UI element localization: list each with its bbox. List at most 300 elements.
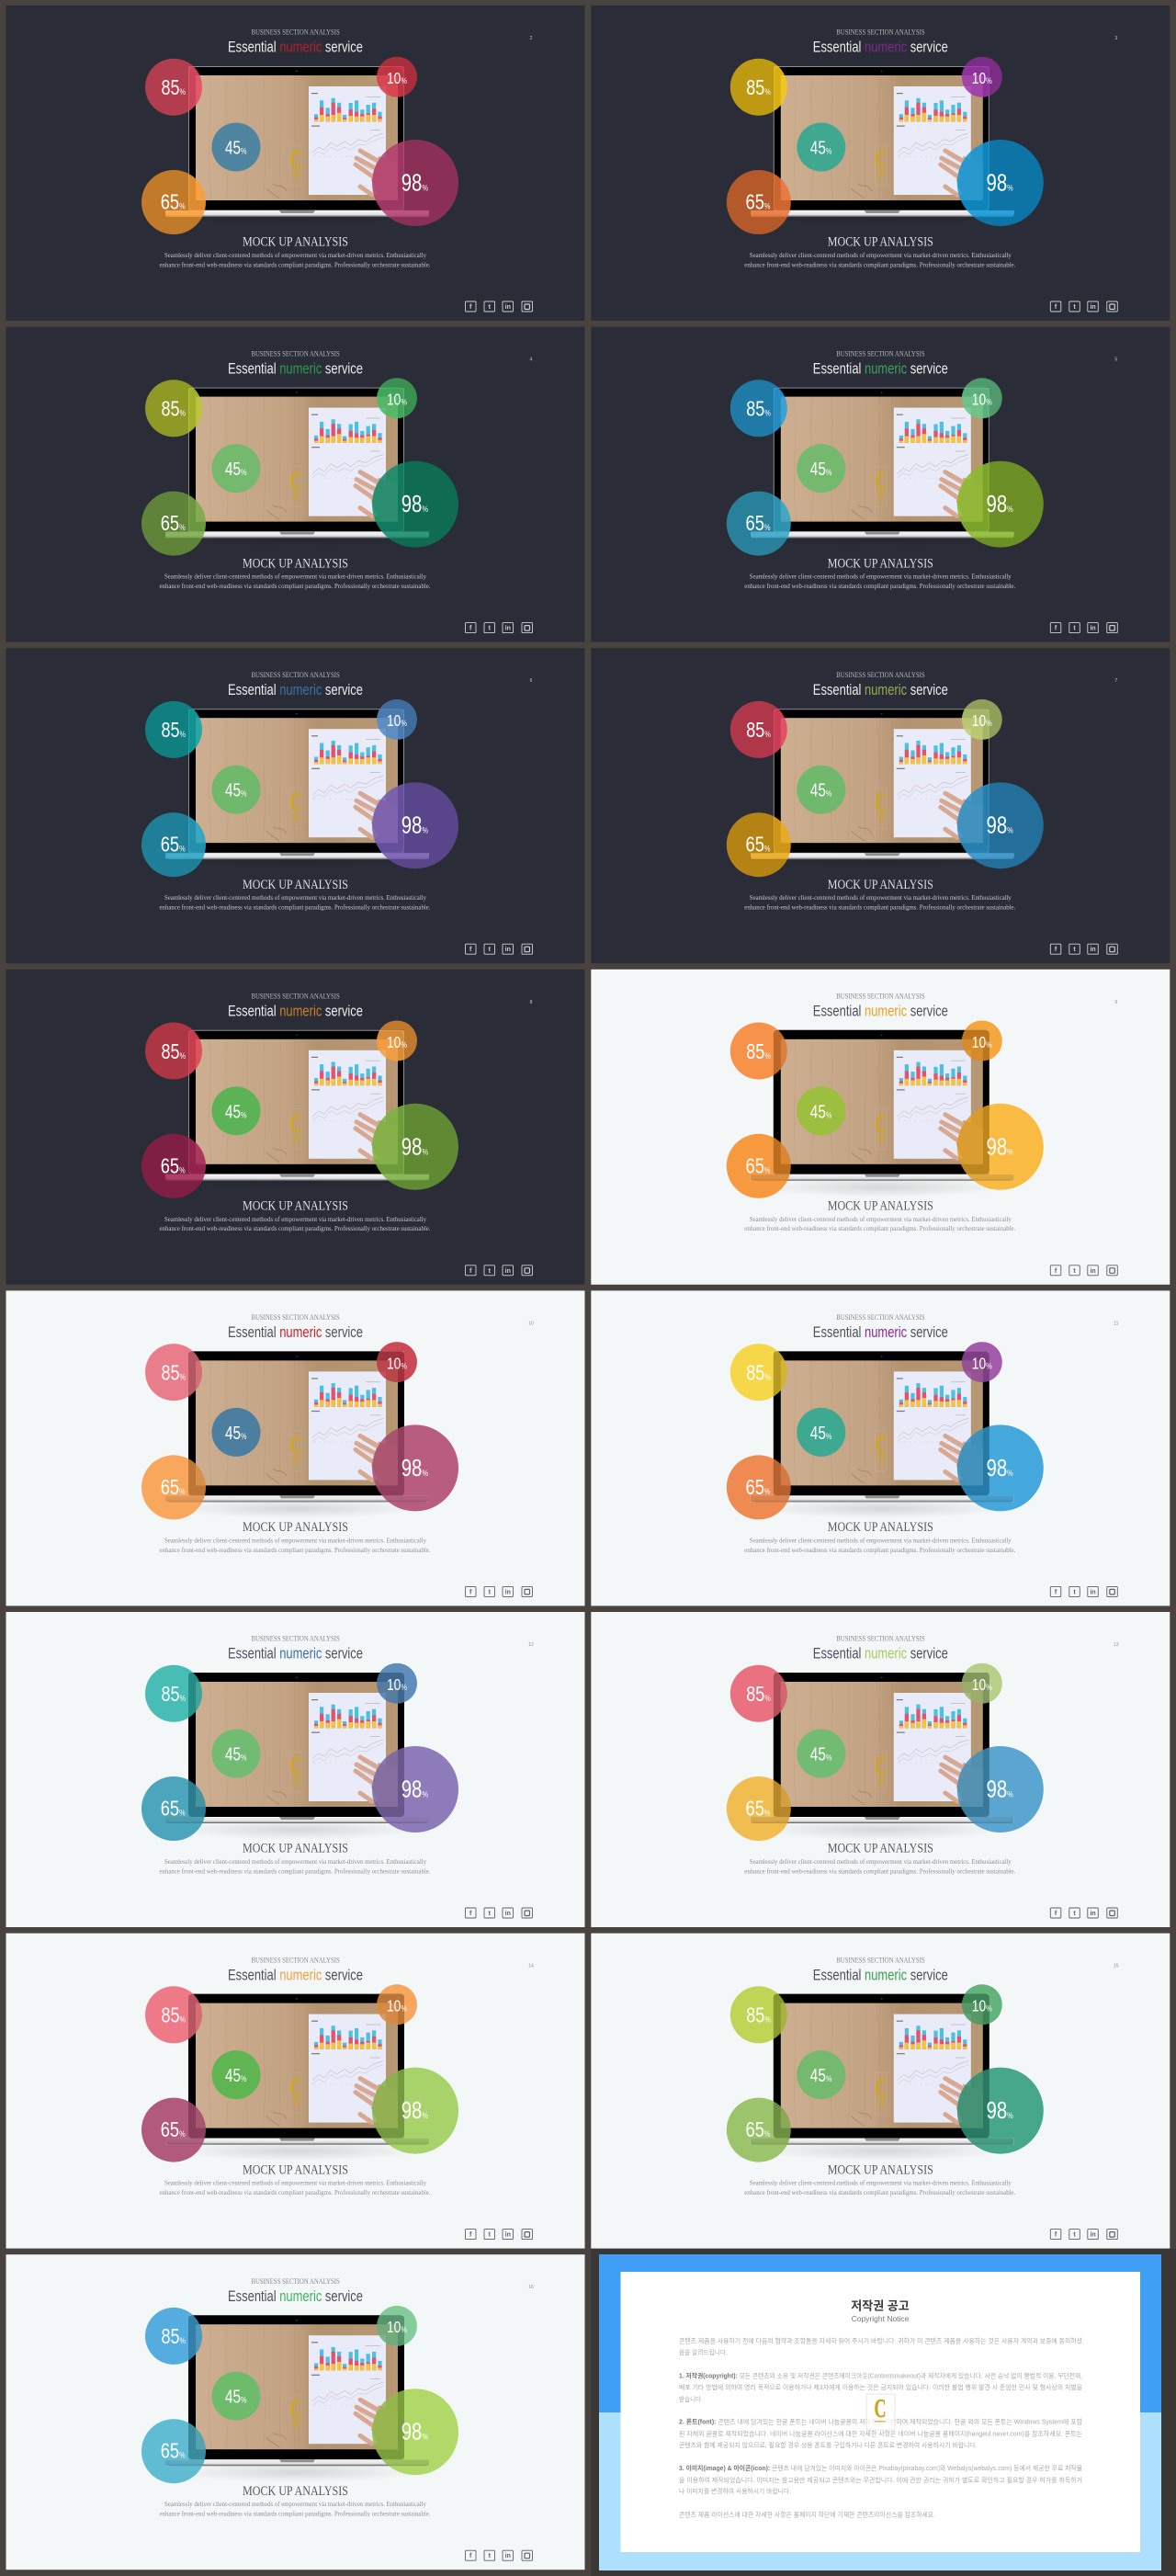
stat 45%: 45%	[225, 2066, 247, 2086]
stat 10%	[377, 57, 417, 97]
heading: MOCK UP ANALYSIS	[243, 1842, 348, 1856]
stat 45%: 45%	[810, 138, 832, 158]
body text: Seamlessly deliver client-centered methods of empowerment via market-driven metrics. Enthusiastically	[164, 2179, 426, 2187]
panel: slide 2 dark red	[6, 6, 584, 321]
social icons: f	[469, 304, 472, 311]
stat 65%	[727, 1134, 791, 1198]
page number: 2	[530, 36, 533, 41]
notice section 3 image and icon	[679, 2464, 1083, 2495]
title: Essential numeric service	[228, 1323, 363, 1341]
subtitle: BUSINESS SECTION ANALYSIS	[252, 349, 340, 357]
stat 45%: 45%	[810, 2066, 832, 2086]
social icons: in	[1090, 626, 1096, 632]
stat 85%: 85%	[746, 718, 771, 742]
social icons: t	[489, 304, 492, 311]
stat 98%: 98%	[401, 490, 428, 517]
stat 10%	[962, 1663, 1002, 1704]
social icons: t	[1073, 2232, 1076, 2239]
stat 65%	[141, 2098, 206, 2162]
stat 85%	[730, 1022, 787, 1079]
title: Essential numeric service	[228, 1645, 363, 1662]
body text: Seamlessly deliver client-centered methods of empowerment via market-driven metrics. Enthusiastically	[750, 573, 1012, 581]
stat 65%: 65%	[161, 189, 186, 213]
stat 45%	[797, 444, 845, 493]
title: Essential numeric service	[228, 39, 363, 56]
panel: slide 14 light pink lime	[6, 1934, 584, 2249]
body text: enhance front-end web-readiness via standards compliant paradigms. Professionally orchestrate sustainable.	[744, 2188, 1015, 2196]
title: Essential numeric service	[813, 1003, 948, 1020]
social icons	[1050, 944, 1117, 954]
stat 85%: 85%	[746, 75, 771, 99]
stat 45%	[211, 766, 261, 814]
social icons: in	[1090, 304, 1096, 311]
stat 10%	[962, 378, 1002, 418]
stat 45%: 45%	[810, 460, 832, 480]
panel: slide 3 dark purple	[591, 6, 1170, 321]
stat 85%: 85%	[162, 1039, 186, 1063]
body text	[744, 1536, 1015, 1554]
notice section 2 font: 2. 폰트(font): 콘텐츠 내에 담겨있는 한글 폰트는 네이버 나눔글꼴의 저작권을 기반하여 제작되었습니다. 한글 외의 모든 폰트는 Windows System에 포함	[679, 2418, 1083, 2426]
stat 65%: 65%	[161, 1153, 186, 1177]
body text	[160, 893, 431, 912]
panel: slide 4 dark green	[6, 327, 584, 642]
page number: 12	[528, 1642, 534, 1648]
social icons: t	[489, 626, 492, 632]
stat 45%: 45%	[225, 138, 247, 158]
stat 65%	[141, 812, 206, 877]
body text: enhance front-end web-readiness via standards compliant paradigms. Professionally orchestrate sustainable.	[160, 2510, 431, 2518]
body text: enhance front-end web-readiness via standards compliant paradigms. Professionally orchestrate sustainable.	[160, 1867, 431, 1875]
social icons	[465, 2550, 533, 2560]
stat 10%	[377, 1663, 417, 1704]
notice intro: 음을 알려드립니다.	[679, 2348, 728, 2356]
body text: Seamlessly deliver client-centered methods of empowerment via market-driven metrics. Enthusiastically	[164, 1857, 426, 1866]
stat 45%: 45%	[225, 1424, 247, 1444]
social icons: f	[469, 1589, 472, 1595]
stat 45%: 45%	[810, 1424, 832, 1444]
stat 85%	[730, 1344, 787, 1401]
subtitle: BUSINESS SECTION ANALYSIS	[252, 2277, 340, 2286]
social icons: in	[1090, 2232, 1096, 2239]
page number: 4	[530, 357, 533, 363]
laptop mockup: C	[876, 468, 887, 496]
body text: enhance front-end web-readiness via standards compliant paradigms. Professionally orchestrate sustainable.	[744, 1224, 1015, 1232]
stat 65%	[727, 492, 791, 556]
social icons: in	[505, 947, 511, 953]
notice intro	[679, 2336, 1083, 2356]
subtitle: BUSINESS SECTION ANALYSIS	[836, 671, 925, 679]
social icons: f	[469, 947, 472, 953]
stat 10%	[377, 378, 417, 418]
body text: enhance front-end web-readiness via standards compliant paradigms. Professionally orchestrate sustainable.	[744, 260, 1015, 268]
laptop mockup	[165, 388, 429, 548]
notice section 1 copyright: 받습니다.	[679, 2395, 703, 2403]
stat 65%: 65%	[161, 2439, 186, 2463]
page number: 11	[1114, 1321, 1119, 1326]
page number: 6	[530, 678, 533, 684]
panel: slide 11 light purple	[591, 1290, 1170, 1606]
stat 10%	[377, 1342, 417, 1382]
body text	[744, 1215, 1015, 1232]
stat 10%	[377, 1984, 417, 2025]
stat 85%	[730, 1665, 787, 1722]
stat 98%	[372, 2389, 458, 2475]
laptop mockup: C	[290, 468, 301, 496]
body text: Seamlessly deliver client-centered methods of empowerment via market-driven metrics. Enthusiastically	[750, 1536, 1012, 1544]
notice section 2 font: 콘텐츠와 함께 제공되지 않으므로, 필요할 경우 상용 폰트를 구입하거나 다른 폰트로 변경하여 사용하시기 바랍니다.	[679, 2441, 978, 2449]
laptop mockup: C	[876, 1753, 887, 1781]
stat 10%	[962, 1342, 1002, 1382]
stat 10%: 10%	[972, 391, 992, 409]
laptop mockup	[165, 66, 429, 226]
social icons: t	[489, 2232, 492, 2239]
page number: 7	[1114, 678, 1117, 684]
stat 85%: 85%	[162, 1360, 186, 1384]
stat 45%	[797, 766, 845, 814]
stat 98%: 98%	[987, 2096, 1013, 2124]
laptop mockup: C	[876, 1431, 887, 1459]
body text: Seamlessly deliver client-centered methods of empowerment via market-driven metrics. Enthusiastically	[164, 1215, 426, 1223]
title: Essential numeric service	[228, 681, 363, 698]
laptop mockup: C	[876, 2074, 887, 2103]
stat 98%: 98%	[401, 811, 428, 839]
notice section 3 image and icon: 을 이용하여 제작되었습니다. 이미지는 참고용만 제공되고 콘텐츠와는 무관합니다. 이에 관한 권리는 귀하가 별도로 확인하고 필요할 경우 허가를 취득하거	[679, 2476, 1082, 2484]
laptop mockup	[751, 1351, 1014, 1518]
body text: enhance front-end web-readiness via standards compliant paradigms. Professionally orchestrate sustainable.	[744, 1867, 1015, 1875]
stat 98%	[957, 2068, 1044, 2154]
stat 85%: 85%	[162, 1682, 186, 1706]
stat 98%	[957, 782, 1044, 868]
social icons	[465, 1265, 533, 1276]
stat 10%	[962, 57, 1002, 97]
social icons	[1050, 1586, 1117, 1596]
stat 45%: 45%	[225, 2388, 247, 2408]
panel: slide 13 light red olive	[591, 1612, 1170, 1927]
social icons: in	[505, 1268, 511, 1275]
laptop mockup: C	[290, 2074, 301, 2103]
stat 10%: 10%	[387, 1675, 407, 1694]
stat 10%: 10%	[972, 69, 992, 87]
stat 45%: 45%	[225, 1744, 247, 1765]
stat 98%: 98%	[401, 2096, 428, 2124]
social icons: f	[1055, 947, 1057, 953]
body text: enhance front-end web-readiness via standards compliant paradigms. Professionally orchestrate sustainable.	[160, 1546, 431, 1554]
social icons: f	[469, 1911, 472, 1917]
heading: MOCK UP ANALYSIS	[243, 878, 348, 892]
stat 98%	[957, 461, 1044, 548]
title: Essential numeric service	[813, 1966, 948, 1983]
body text	[744, 1857, 1015, 1875]
stat 85%: 85%	[162, 2324, 186, 2348]
stat 10%: 10%	[972, 1354, 992, 1372]
body text: enhance front-end web-readiness via standards compliant paradigms. Professionally orchestrate sustainable.	[160, 582, 431, 590]
stat 65%	[141, 492, 206, 556]
stat 85%: 85%	[162, 397, 186, 421]
stat 98%	[957, 1104, 1044, 1190]
stat 65%	[727, 812, 791, 877]
stat 45%: 45%	[225, 460, 247, 480]
laptop mockup	[751, 388, 1014, 548]
stat 45%	[797, 123, 845, 171]
stat 85%	[730, 1986, 787, 2043]
stat 98%	[957, 1746, 1044, 1833]
stat 85%	[145, 1665, 202, 1722]
stat 65%: 65%	[161, 1475, 186, 1499]
panel: slide 5 dark blue green	[591, 327, 1170, 642]
social icons: in	[1090, 1589, 1096, 1595]
social icons: in	[505, 2553, 511, 2559]
stat 65%	[141, 1776, 206, 1841]
title: Essential numeric service	[228, 1966, 363, 1983]
stat 65%: 65%	[745, 511, 771, 535]
stat 45%: 45%	[810, 1744, 832, 1765]
panel: slide 7 dark red olive	[591, 648, 1170, 963]
body text: Seamlessly deliver client-centered methods of empowerment via market-driven metrics. Enthusiastically	[750, 1857, 1012, 1866]
body text: Seamlessly deliver client-centered methods of empowerment via market-driven metrics. Enthusiastically	[164, 573, 426, 581]
laptop mockup	[751, 1673, 1014, 1840]
stat 45%: 45%	[225, 1102, 247, 1122]
body text: Seamlessly deliver client-centered methods of empowerment via market-driven metrics. Enthusiastically	[164, 1536, 426, 1544]
title: Essential numeric service	[813, 359, 948, 377]
page number: 9	[1114, 1000, 1117, 1005]
heading: MOCK UP ANALYSIS	[243, 235, 348, 250]
stat 65%	[141, 170, 206, 234]
body text: Seamlessly deliver client-centered methods of empowerment via market-driven metrics. Enthusiastically	[750, 1215, 1012, 1223]
body text: enhance front-end web-readiness via standards compliant paradigms. Professionally orchestrate sustainable.	[744, 903, 1015, 912]
heading: MOCK UP ANALYSIS	[828, 1520, 933, 1535]
stat 10%: 10%	[972, 1033, 992, 1051]
stat 98%	[957, 140, 1044, 226]
stat 10%	[962, 699, 1002, 740]
stat 85%	[145, 1022, 202, 1079]
stat 98%: 98%	[401, 2418, 428, 2445]
social icons: t	[489, 1589, 492, 1595]
body text: Seamlessly deliver client-centered methods of empowerment via market-driven metrics. Enthusiastically	[750, 2179, 1012, 2187]
stat 10%: 10%	[387, 1033, 407, 1051]
notice section 1 copyright	[679, 2371, 1083, 2403]
page number: 10	[528, 1321, 534, 1326]
icon: C logo watermark	[866, 2394, 895, 2430]
social icons: f	[469, 2553, 472, 2559]
stat 10%: 10%	[972, 1675, 992, 1694]
laptop mockup: C	[290, 1110, 301, 1139]
panel: slide 9 light orange	[591, 970, 1170, 1285]
laptop mockup	[165, 709, 429, 868]
page number: 14	[528, 1964, 534, 1969]
social icons	[465, 1586, 533, 1596]
social icons: f	[469, 2232, 472, 2239]
stat 98%: 98%	[987, 1454, 1013, 1481]
social icons: in	[505, 1589, 511, 1595]
title: Essential numeric service	[228, 359, 363, 377]
notice section 3 image and icon: 3. 이미지(image) & 아이콘(icon): 콘텐츠 내에 담겨있는 이미지와 아이콘은 Pixabay(pixabay.com)와 Webalys(webalys.com) 등에서 제공한 무료 저작물	[679, 2464, 1083, 2472]
stat 65%	[727, 1776, 791, 1841]
body text	[744, 251, 1015, 268]
stat 45%	[797, 1086, 845, 1135]
title: Essential numeric service	[228, 2287, 363, 2305]
body text	[160, 1857, 431, 1875]
subtitle: BUSINESS SECTION ANALYSIS	[836, 1956, 925, 1964]
stat 10%	[377, 1020, 417, 1061]
stat 65%	[727, 1455, 791, 1519]
stat 45%: 45%	[810, 781, 832, 801]
body text	[160, 2179, 431, 2196]
title: Essential numeric service	[813, 39, 948, 56]
stat 98%	[372, 1104, 458, 1190]
title: Essential numeric service	[813, 1645, 948, 1662]
laptop mockup: C	[876, 789, 887, 817]
stat 85%: 85%	[162, 718, 186, 742]
social icons: t	[489, 2553, 492, 2559]
stat 85%	[145, 701, 202, 758]
notice section 2 font	[679, 2418, 1083, 2449]
stat 45%	[211, 1730, 261, 1777]
laptop mockup	[165, 2315, 429, 2482]
social icons: t	[489, 947, 492, 953]
laptop mockup	[751, 1994, 1014, 2162]
panel: copyright notice	[591, 2249, 1176, 2576]
stat 10%	[377, 699, 417, 740]
stat 98%: 98%	[987, 1776, 1013, 1803]
subtitle: BUSINESS SECTION ANALYSIS	[252, 1635, 340, 1643]
stat 10%: 10%	[387, 2318, 407, 2336]
stat 85%	[145, 59, 202, 116]
notice section 3 image and icon: 나 이미지를 변경하여 사용하시기 바랍니다.	[679, 2487, 791, 2495]
stat 85%	[730, 701, 787, 758]
laptop mockup: C	[290, 789, 301, 817]
subtitle: BUSINESS SECTION ANALYSIS	[836, 1635, 925, 1643]
social icons: t	[489, 1268, 492, 1275]
body text: Seamlessly deliver client-centered methods of empowerment via market-driven metrics. Enthusiastically	[164, 251, 426, 259]
laptop mockup: C	[290, 2395, 301, 2423]
page number: 5	[1114, 357, 1117, 363]
stat 98%	[372, 782, 458, 868]
stat 98%	[372, 1746, 458, 1833]
body text: enhance front-end web-readiness via standards compliant paradigms. Professionally orchestrate sustainable.	[744, 582, 1015, 590]
body text: Seamlessly deliver client-centered methods of empowerment via market-driven metrics. Enthusiastically	[750, 893, 1012, 902]
heading: MOCK UP ANALYSIS	[243, 2484, 348, 2499]
stat 45%	[797, 1408, 845, 1457]
subtitle: BUSINESS SECTION ANALYSIS	[836, 349, 925, 357]
stat 85%	[145, 1986, 202, 2043]
icon: C logo watermark: C	[875, 2395, 886, 2423]
panel: slide 10 light red	[6, 1290, 584, 1606]
social icons: t	[1073, 947, 1076, 953]
panel: slide 16 light blue lime	[6, 2254, 584, 2570]
stat 65%: 65%	[161, 2117, 186, 2141]
stat 10%	[377, 2306, 417, 2346]
stat 98%	[372, 1424, 458, 1511]
body text: Seamlessly deliver client-centered methods of empowerment via market-driven metrics. Enthusiastically	[164, 893, 426, 902]
stat 65%: 65%	[745, 1475, 771, 1499]
stat 10%: 10%	[387, 711, 407, 730]
social icons: in	[505, 2232, 511, 2239]
social icons: t	[1073, 1589, 1076, 1595]
stat 98%: 98%	[401, 169, 428, 197]
social icons: f	[1055, 2232, 1057, 2239]
notice title: 저작권 공고	[851, 2299, 910, 2312]
heading: MOCK UP ANALYSIS	[828, 1842, 933, 1856]
stat 65%: 65%	[745, 2117, 771, 2141]
stat 65%: 65%	[745, 1796, 771, 1820]
heading: MOCK UP ANALYSIS	[243, 1520, 348, 1535]
body text: enhance front-end web-readiness via standards compliant paradigms. Professionally orchestrate sustainable.	[744, 1546, 1015, 1554]
heading: MOCK UP ANALYSIS	[243, 556, 348, 571]
stat 85%	[730, 59, 787, 116]
heading: MOCK UP ANALYSIS	[828, 2162, 933, 2177]
stat 98%: 98%	[401, 1454, 428, 1481]
body text	[160, 1536, 431, 1554]
notice section 1 copyright: 1. 저작권(copyright): 모든 콘텐츠의 소유 및 저작권은 콘텐츠메이크아웃(Contentsmakeout)과 제작자에게 있습니다. 사전 승낙 없이 불법적 이용, 무단전재,	[679, 2371, 1082, 2380]
body text	[160, 573, 431, 590]
laptop mockup: C	[876, 1110, 887, 1139]
title: Essential numeric service	[228, 1003, 363, 1020]
laptop mockup	[165, 1994, 429, 2162]
laptop mockup: C	[290, 1753, 301, 1781]
stat 45%	[211, 2372, 261, 2421]
subtitle: BUSINESS SECTION ANALYSIS	[252, 28, 340, 37]
stat 85%: 85%	[746, 1360, 771, 1384]
social icons	[1050, 623, 1117, 633]
social icons: in	[505, 304, 511, 311]
heading: MOCK UP ANALYSIS	[828, 556, 933, 571]
stat 10%: 10%	[387, 1997, 407, 2015]
laptop mockup	[165, 1030, 429, 1190]
laptop mockup	[751, 66, 1014, 226]
notice closing line: 콘텐츠 제품 라이선스에 대한 자세한 사항은 홈페이지 하단에 기재한 콘텐츠라이선스를 참조하세요.	[679, 2510, 935, 2518]
heading: MOCK UP ANALYSIS	[828, 1199, 933, 1214]
subtitle: BUSINESS SECTION ANALYSIS	[836, 993, 925, 1001]
subtitle: BUSINESS SECTION ANALYSIS	[252, 1313, 340, 1322]
notice intro: 콘텐츠 제품을 사용하기 전에 다음의 협약과 조항들을 자세히 읽어 주시기 바랍니다. 귀하가 이 콘텐츠 제품을 사용하는 것은 사용자 계약과 보증에 동의하셨	[679, 2336, 1083, 2345]
subtitle: BUSINESS SECTION ANALYSIS	[252, 1956, 340, 1964]
stat 45%	[797, 1730, 845, 1777]
body text	[160, 2500, 431, 2518]
social icons	[465, 2230, 533, 2240]
stat 10%: 10%	[972, 1997, 992, 2015]
stat 98%: 98%	[987, 490, 1013, 517]
stat 98%: 98%	[987, 811, 1013, 839]
social icons: f	[1055, 1911, 1057, 1917]
social icons	[465, 1908, 533, 1918]
body text	[744, 2179, 1015, 2196]
social icons: in	[505, 626, 511, 632]
subtitle: BUSINESS SECTION ANALYSIS	[836, 28, 925, 37]
heading: MOCK UP ANALYSIS	[828, 878, 933, 892]
stat 65%: 65%	[161, 833, 186, 857]
social icons: t	[1073, 626, 1076, 632]
subtitle: BUSINESS SECTION ANALYSIS	[836, 1313, 925, 1322]
social icons: in	[505, 1911, 511, 1917]
stat 98%	[372, 461, 458, 548]
social icons: f	[1055, 626, 1057, 632]
panel: slide 8 dark red orange	[6, 970, 584, 1285]
stat 65%: 65%	[745, 833, 771, 857]
page number: 15	[1114, 1964, 1119, 1969]
social icons: t	[1073, 1268, 1076, 1275]
stat 85%: 85%	[746, 397, 771, 421]
stat 10%	[962, 1984, 1002, 2025]
stat 98%: 98%	[987, 1132, 1013, 1160]
subtitle: BUSINESS SECTION ANALYSIS	[252, 671, 340, 679]
laptop mockup: C	[290, 1431, 301, 1459]
social icons: t	[489, 1911, 492, 1917]
stat 65%: 65%	[161, 1796, 186, 1820]
body text: enhance front-end web-readiness via standards compliant paradigms. Professionally orchestrate sustainable.	[160, 1224, 431, 1232]
page number: 8	[530, 1000, 533, 1005]
heading: MOCK UP ANALYSIS	[243, 2162, 348, 2177]
laptop mockup: C	[876, 146, 887, 175]
